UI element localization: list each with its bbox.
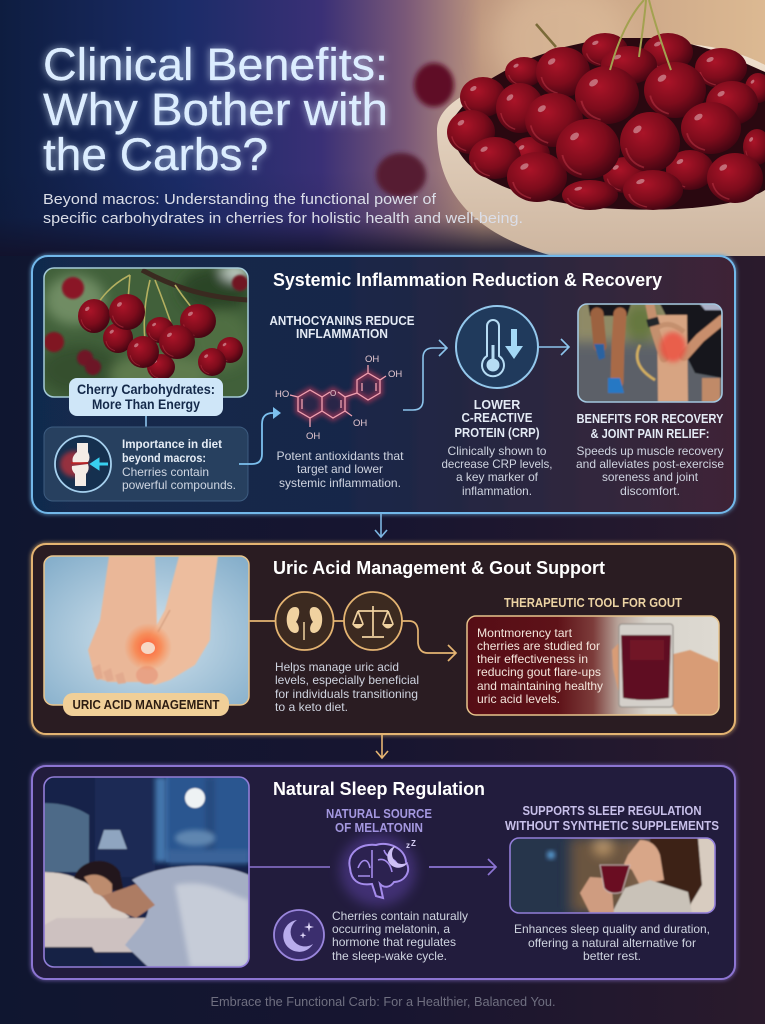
callout: importance in diet: powerful compounds.: [122, 478, 236, 492]
panel: sleep: [32, 766, 735, 979]
title: [43, 39, 388, 180]
label: cherry carbohydrates: Cherry Carbohydrates:: [77, 382, 215, 397]
callout: montmorency cherries: and maintaining healthy: [477, 679, 603, 693]
photo: foot with gout: [44, 556, 249, 705]
text: melatonin: the sleep-wake cycle.: [332, 949, 447, 963]
heading: anthocyanins: [270, 314, 414, 341]
arrow: to CRP: [403, 340, 447, 410]
callout: importance in diet: [44, 427, 248, 501]
text: uric acid levels: levels, especially beneficial: [275, 673, 419, 687]
heading: supports sleep: SUPPORTS SLEEP REGULATION: [522, 804, 702, 818]
text: melatonin: [332, 909, 468, 963]
text: enhances sleep: [514, 922, 710, 963]
icon: anthocyanin molecule: [275, 354, 402, 442]
text: benefits for recovery: & JOINT PAIN RELIEF:: [590, 427, 710, 441]
text: melatonin: occurring melatonin, a: [332, 922, 450, 936]
text: potent antioxidants: [276, 449, 404, 490]
text: benefits for recovery: [576, 412, 724, 498]
icon: brain with moon: Z: [411, 839, 416, 848]
text: enhances sleep: Enhances sleep quality and duration,: [514, 922, 710, 936]
subtitle: specific carbohydrates in cherries for holistic health and well-being.: [43, 211, 523, 227]
callout: montmorency cherries: reducing gout flare-ups: [477, 665, 601, 679]
icon: anthocyanin molecule: HO: [275, 389, 289, 400]
icon: anthocyanin molecule: OH: [388, 369, 402, 380]
subtitle: Beyond macros: Understanding the functional power of: [43, 192, 437, 208]
icon: moon and stars: [274, 910, 324, 960]
text: lower CRP: a key marker of: [456, 470, 539, 484]
header background with cherry bowl photo: [0, 0, 765, 258]
label: cherry carbohydrates: [69, 378, 223, 416]
text: benefits for recovery: Speeds up muscle recovery: [576, 444, 724, 458]
cherry bowl: [437, 0, 765, 258]
icon: loose blurred cherries: [376, 63, 454, 197]
title: the Carbs?: [43, 129, 268, 180]
heading: systemic inflammation: Systemic Inflammation Reduction & Recovery: [273, 270, 662, 290]
heading: supports sleep: [505, 804, 719, 833]
text: benefits for recovery: BENEFITS FOR RECOVERY: [576, 412, 724, 426]
text: potent antioxidants: systemic inflammation.: [279, 476, 401, 490]
arrow: panel 1 to panel 2: [375, 513, 387, 537]
heading: natural source of melatonin: NATURAL SOURCE: [326, 807, 432, 821]
arrow: panel 2 to panel 3: [376, 734, 388, 758]
photo: runner and knee: [578, 304, 722, 402]
text: benefits for recovery: discomfort.: [620, 484, 680, 498]
text: benefits for recovery: soreness and joint: [602, 470, 699, 484]
text: uric acid levels: Helps manage uric acid: [275, 660, 399, 674]
icon: knee joint: [55, 436, 111, 492]
icon: anthocyanin molecule: OH: [365, 354, 379, 365]
callout: importance in diet: beyond macros:: [122, 451, 206, 465]
photo: woman drinking juice: [510, 838, 720, 913]
icon: anthocyanin molecule: OH: [306, 431, 320, 442]
panel: uric acid: [32, 544, 735, 734]
arrow: to anthocyanins: [239, 407, 281, 464]
footer: Embrace the Functional Carb: For a Healthier, Balanced You.: [210, 995, 556, 1009]
callout: montmorency cherries: Montmorency tart: [477, 626, 573, 640]
label: cherry carbohydrates: More Than Energy: [92, 397, 200, 412]
photo: woman sleeping: [44, 777, 249, 967]
text: lower CRP: [442, 398, 552, 498]
text: lower CRP: C-REACTIVE: [462, 411, 532, 425]
icon: brain with moon: [340, 834, 416, 906]
callout: montmorency cherries: [467, 616, 725, 718]
callout: importance in diet: Cherries contain: [122, 465, 209, 479]
icon: thermometer down: [456, 306, 538, 388]
icon: anthocyanin molecule: OH: [353, 418, 367, 429]
title: Why Bother with: [43, 84, 388, 135]
icon: anthocyanin molecule: O: [330, 389, 336, 398]
text: lower CRP: inflammation.: [462, 484, 532, 498]
callout: importance in diet: Importance in diet: [122, 437, 222, 451]
text: lower CRP: PROTEIN (CRP): [454, 426, 540, 440]
heading: uric acid: Uric Acid Management & Gout Support: [273, 558, 605, 578]
label: uric acid management: URIC ACID MANAGEMENT: [72, 698, 220, 712]
text: lower CRP: decrease CRP levels,: [442, 457, 552, 471]
heading: anthocyanins: ANTHOCYANINS REDUCE: [270, 314, 414, 328]
text: potent antioxidants: target and lower: [297, 462, 383, 476]
callout: montmorency cherries: uric acid levels.: [477, 692, 560, 706]
callout: montmorency cherries: cherries are studied for: [477, 639, 600, 653]
text: enhances sleep: offering a natural alternative for: [528, 936, 696, 950]
text: uric acid levels: to a keto diet.: [275, 700, 348, 714]
icon: brain with moon: z: [406, 841, 410, 850]
text: melatonin: Cherries contain naturally: [332, 909, 468, 923]
heading: therapeutic tool: THERAPEUTIC TOOL FOR GOUT: [504, 596, 682, 610]
icon: kidneys: [276, 592, 334, 650]
text: potent antioxidants: Potent antioxidants that: [276, 449, 404, 463]
callout: montmorency cherries: their effectiveness in: [477, 652, 588, 666]
text: uric acid levels: for individuals transitioning: [275, 687, 418, 701]
label: uric acid management: [63, 693, 229, 716]
text: lower CRP: LOWER: [474, 398, 520, 412]
heading: natural sleep: Natural Sleep Regulation: [273, 779, 485, 799]
arrow: to supports sleep: [429, 859, 496, 875]
text: melatonin: hormone that regulates: [332, 935, 456, 949]
text: uric acid levels: [275, 660, 419, 714]
heading: natural source of melatonin: OF MELATONIN: [335, 821, 423, 835]
heading: anthocyanins: INFLAMMATION: [296, 327, 388, 341]
photo: cherries on branch: [40, 264, 250, 397]
panel: systemic inflammation: [32, 256, 735, 513]
title: Clinical Benefits:: [43, 39, 388, 90]
subtitle: [43, 192, 523, 227]
icon: balance scale: [344, 592, 402, 650]
heading: supports sleep: WITHOUT SYNTHETIC SUPPLEMENTS: [505, 819, 719, 833]
text: enhances sleep: better rest.: [583, 949, 641, 963]
text: benefits for recovery: and alleviates post-exercise: [576, 457, 724, 471]
text: lower CRP: Clinically shown to: [448, 444, 547, 458]
arrow: to recovery: [538, 339, 569, 355]
arrow: to therapeutic tool: [402, 621, 456, 661]
heading: natural source of melatonin: [326, 807, 432, 835]
